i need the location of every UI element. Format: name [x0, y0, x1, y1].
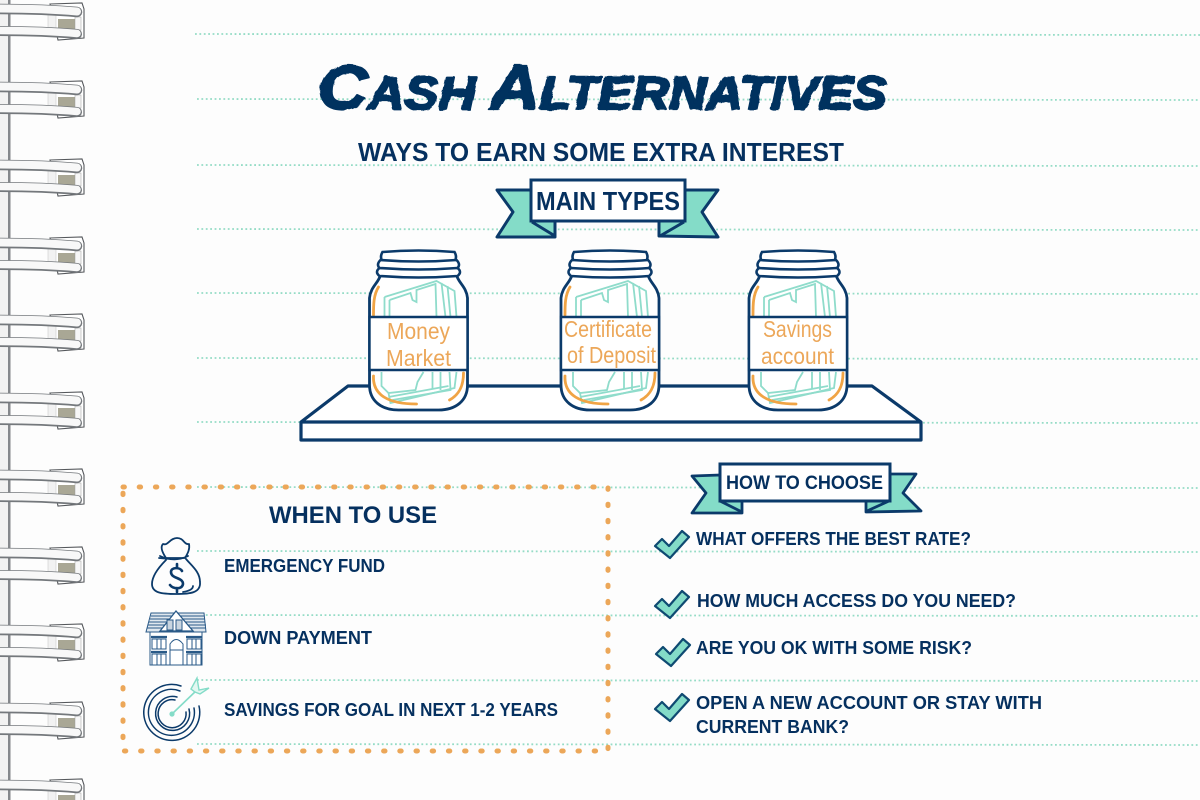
- spiral binding: [0, 0, 84, 800]
- jar: money market: Market: [386, 345, 452, 371]
- subtitle: WAYS TO EARN SOME EXTRA INTEREST: [358, 137, 844, 167]
- jar: savings account: account: [761, 343, 835, 369]
- jar: certificate of deposit: Certificate: [564, 316, 652, 342]
- icon: target: [144, 678, 209, 740]
- checklist: how to choose: [655, 529, 1042, 737]
- item 1: WHAT OFFERS THE BEST RATE?: [696, 529, 971, 549]
- item 1: [655, 529, 971, 558]
- item 4: CURRENT BANK?: [696, 717, 849, 737]
- item: emergency fund: EMERGENCY FUND: [224, 556, 385, 576]
- dotted notebook lines: [195, 34, 1200, 745]
- banner label: HOW TO CHOOSE: [726, 473, 883, 494]
- jar: savings account: Savings: [763, 316, 832, 342]
- heading: when to use: WHEN TO USE: [269, 502, 437, 529]
- item 4: [655, 693, 1042, 737]
- banner: main types: [497, 180, 718, 237]
- jar: savings account: [749, 250, 847, 410]
- panel: when to use: [123, 487, 608, 751]
- item 2: [655, 591, 1016, 618]
- banner: how to choose: [692, 464, 921, 513]
- jar: money market: Money: [387, 318, 450, 344]
- title: CASH ALTERNATIVES: [318, 54, 887, 123]
- item 3: ARE YOU OK WITH SOME RISK?: [696, 638, 972, 658]
- jar: money market: [370, 250, 468, 410]
- jar: certificate of deposit: [561, 250, 659, 410]
- shelf: [301, 386, 921, 440]
- item 4: OPEN A NEW ACCOUNT OR STAY WITH: [696, 693, 1042, 713]
- banner label: MAIN TYPES: [536, 186, 680, 216]
- jar: certificate of deposit: of Deposit: [567, 342, 657, 368]
- icon: house: [146, 611, 206, 665]
- item 2: HOW MUCH ACCESS DO YOU NEED?: [697, 591, 1016, 611]
- item: down payment: DOWN PAYMENT: [224, 628, 372, 648]
- item: savings for goal: SAVINGS FOR GOAL IN NEXT 1-2 YEARS: [224, 700, 558, 720]
- item 3: [656, 638, 972, 666]
- icon: money bag: [152, 538, 200, 594]
